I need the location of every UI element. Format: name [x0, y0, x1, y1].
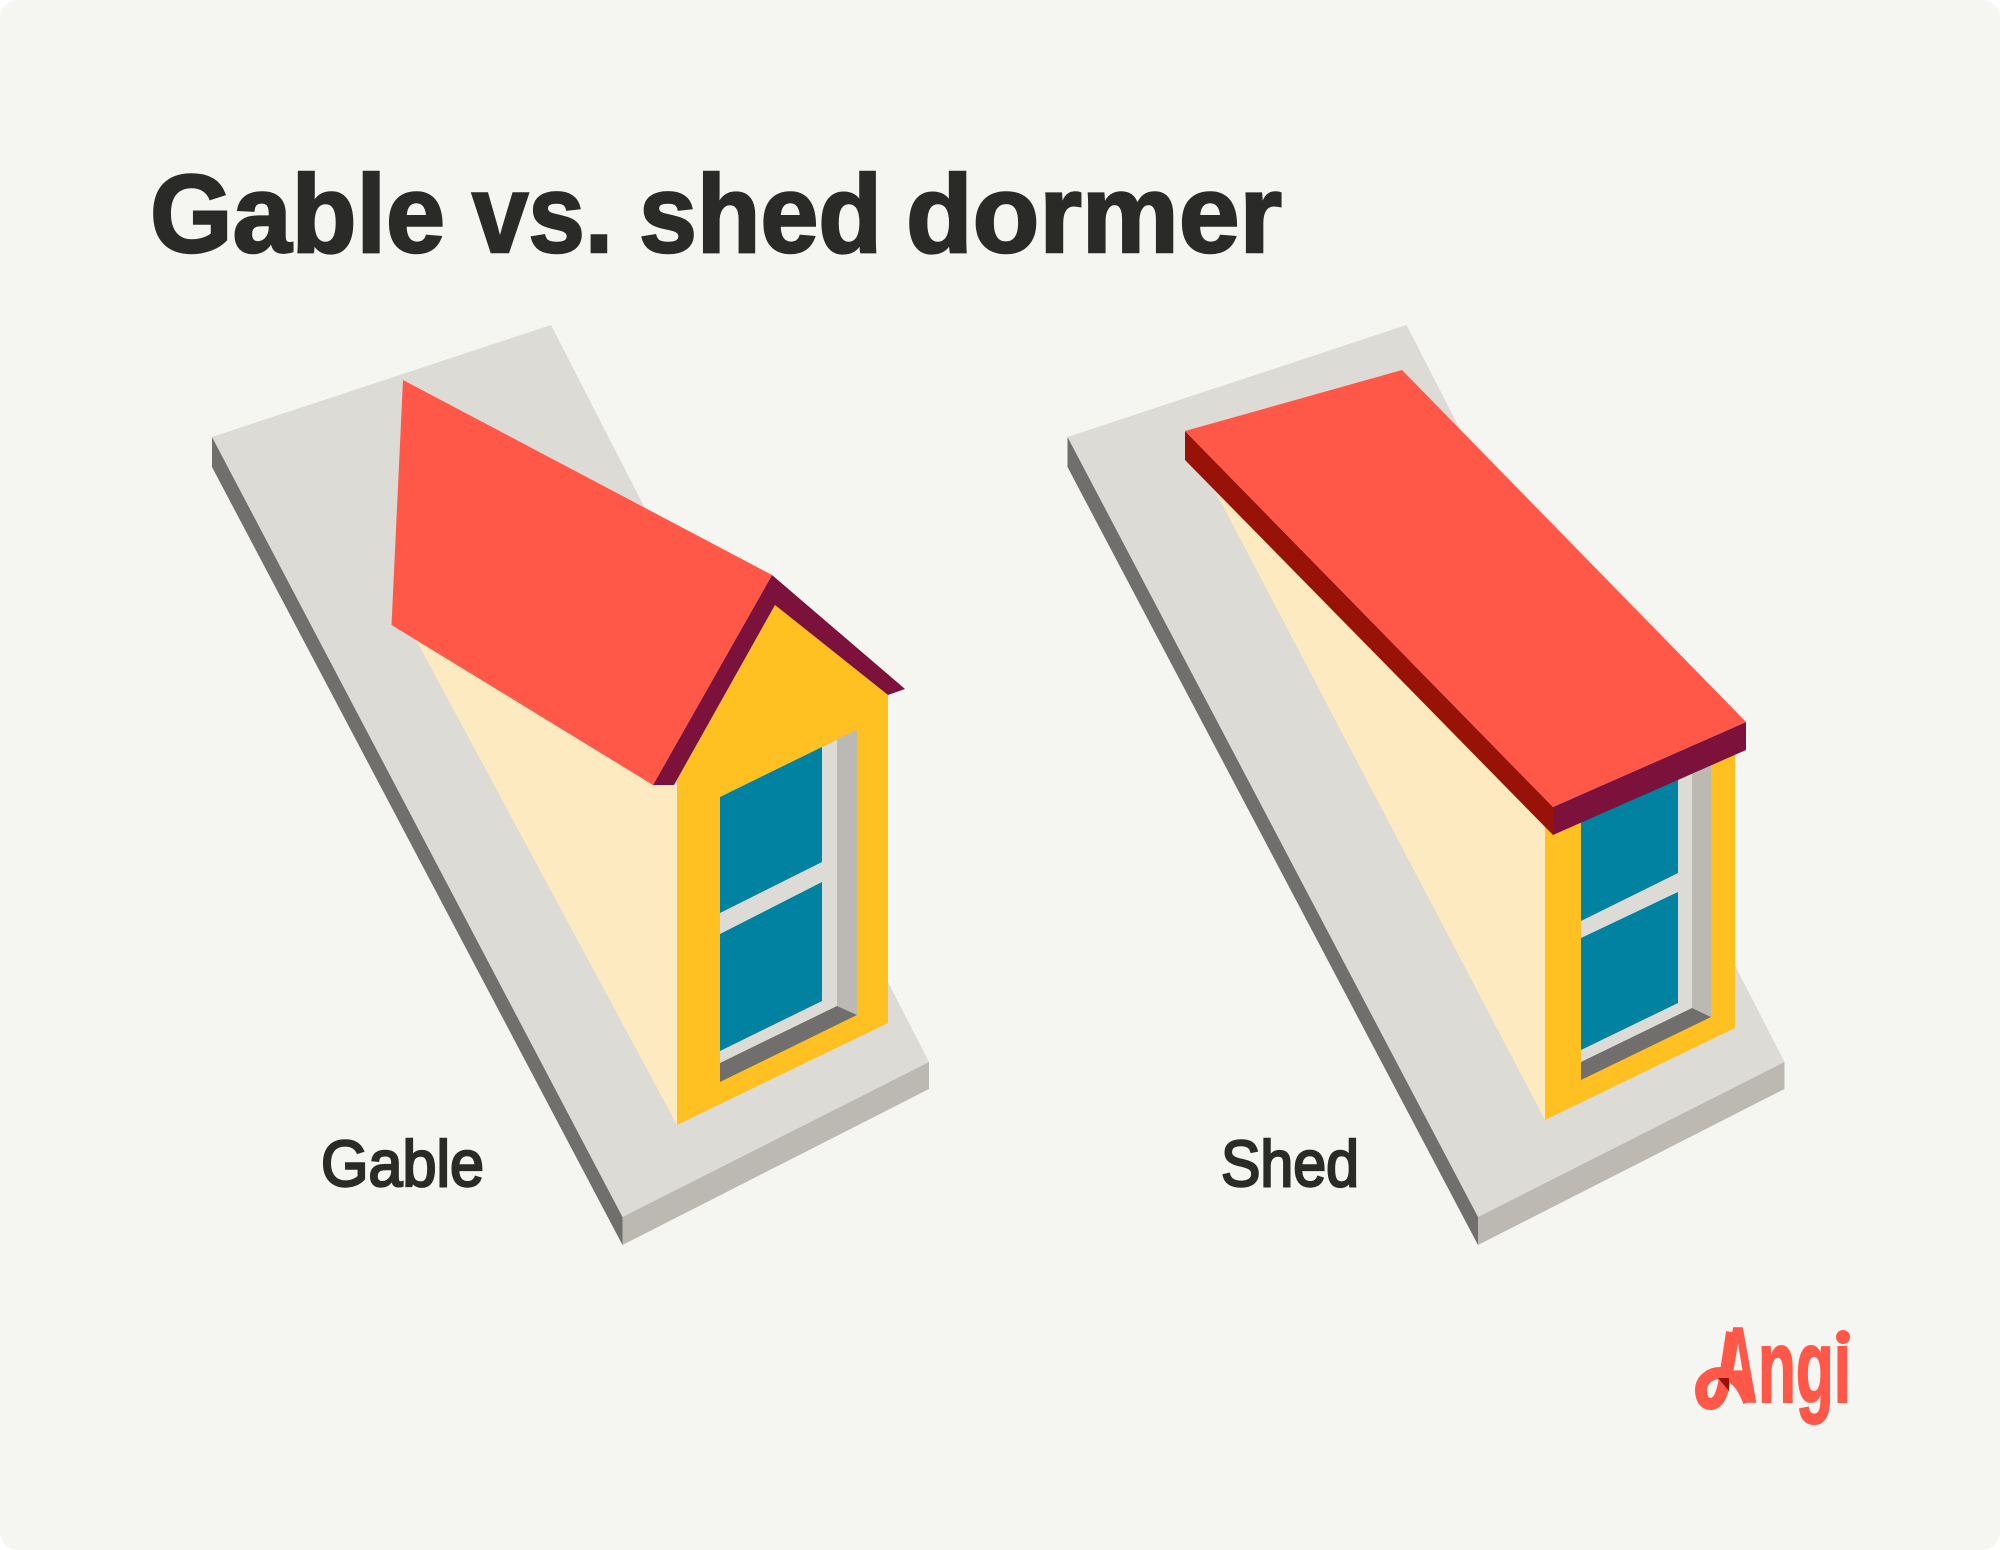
label: shed: Shed	[1221, 1127, 1359, 1200]
logo swash shadow	[1718, 1378, 1729, 1391]
title: shed	[639, 153, 882, 276]
logo: Angi	[1695, 1327, 1850, 1425]
panel: gable dormer illustration	[212, 325, 929, 1245]
dormer side wall	[1212, 485, 1545, 1120]
title: Gable	[150, 153, 445, 276]
dormer side wall	[415, 638, 677, 1125]
title: vs.	[472, 153, 613, 276]
logo: Angi: A	[1719, 1305, 1757, 1425]
label: gable: Gable	[321, 1127, 484, 1200]
logo i-dot	[1836, 1330, 1850, 1344]
shed roof side fascia	[1185, 431, 1553, 835]
logo letters ngi: ngi	[1758, 1309, 1851, 1425]
main roof slab	[212, 325, 929, 1245]
logo i-dot cover	[1832, 1322, 1854, 1344]
window	[720, 730, 857, 1082]
dormer front wall	[677, 605, 888, 1125]
gable roof fascia	[653, 575, 905, 785]
gable roof plane	[392, 380, 772, 785]
shed roof front fascia	[1553, 722, 1746, 835]
main roof slab	[1068, 325, 1784, 1245]
shed roof plane	[1185, 370, 1746, 807]
dormer front wall	[1545, 735, 1735, 1120]
window	[1581, 740, 1711, 1080]
title: dormer	[906, 153, 1282, 276]
logo swash	[1701, 1332, 1749, 1404]
panel: shed dormer illustration	[1068, 325, 1784, 1245]
